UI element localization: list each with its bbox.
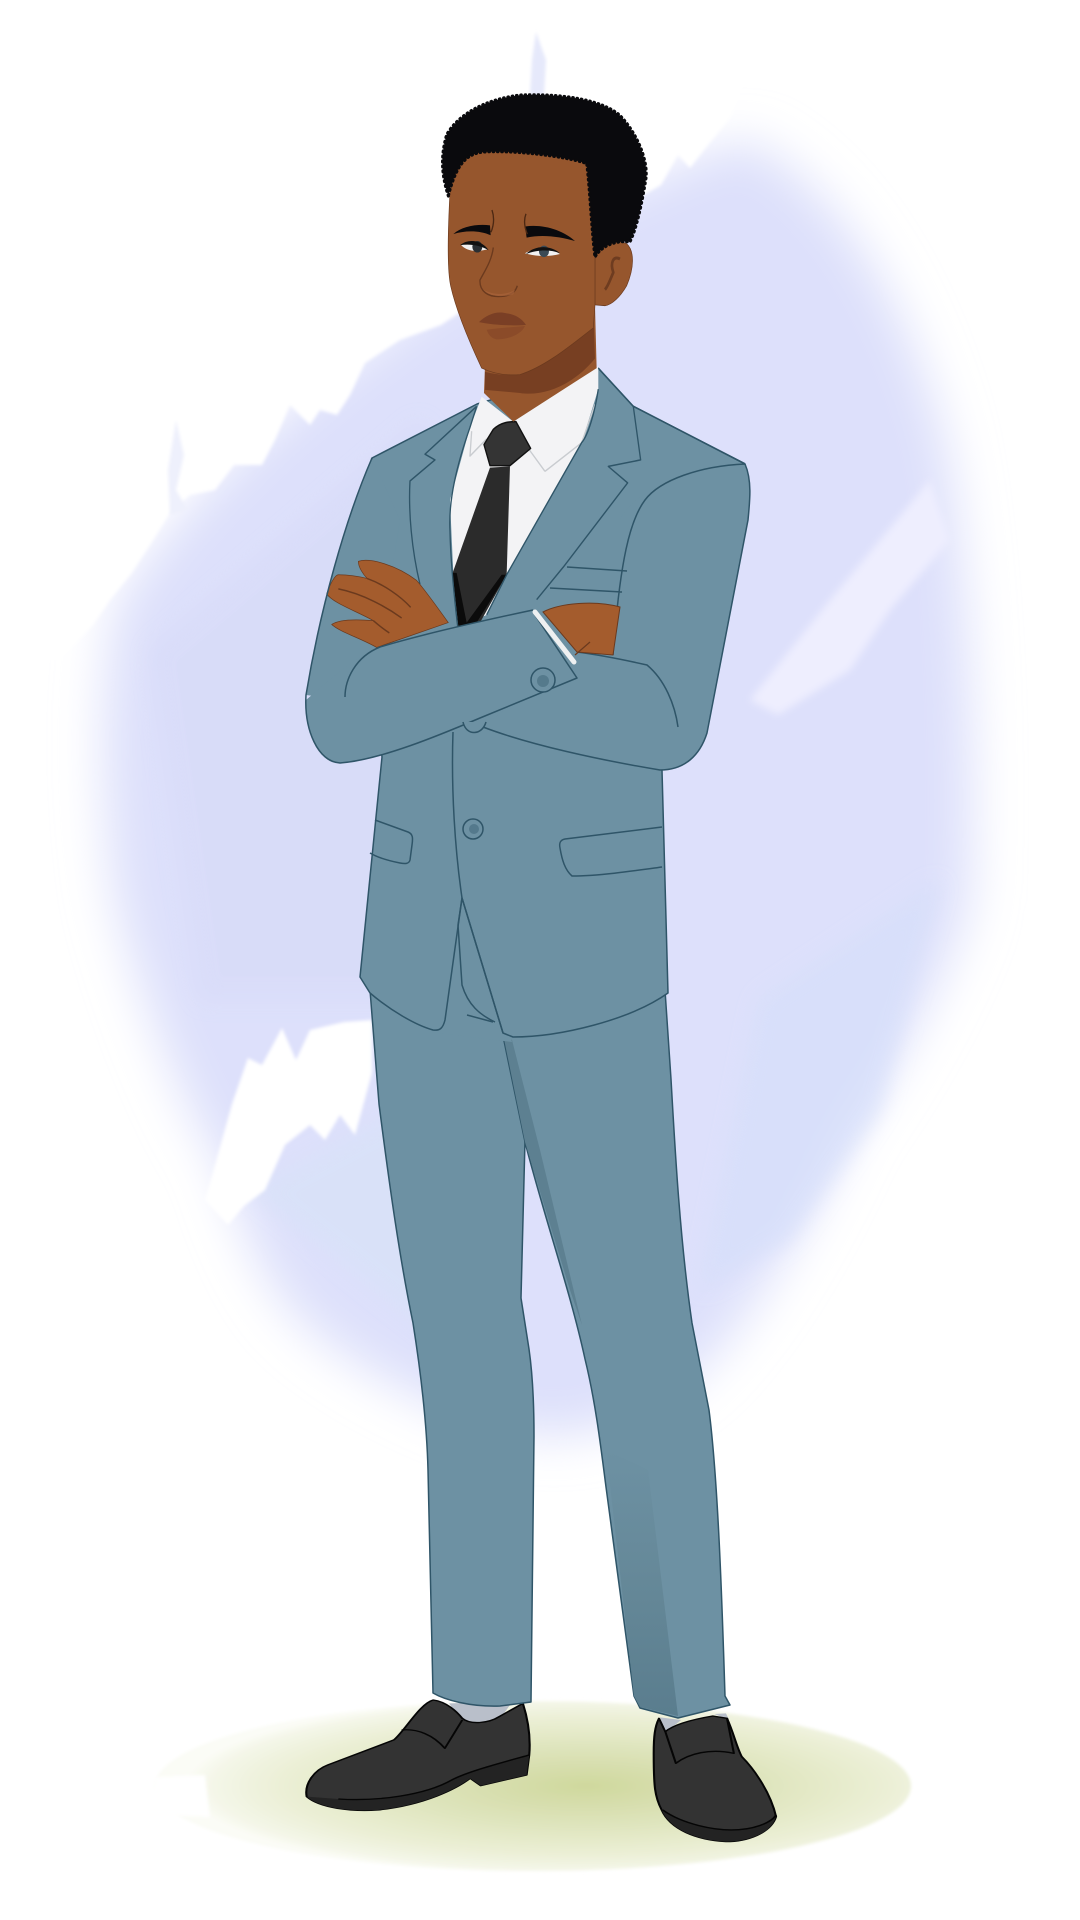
lips [479,312,526,339]
figure: head [442,95,646,422]
figure: left trouser leg [370,990,534,1706]
upper jacket button [463,722,486,732]
figure: left forearm [306,458,577,763]
jacket button [463,819,483,839]
shirt [450,366,598,628]
white torn edge, upper left [0,0,780,660]
figure: left shoe and sock [306,1700,530,1810]
nose shading [483,290,515,296]
brow creases [491,210,527,234]
trouser fill between jacket fronts [430,885,512,1042]
neck shadow [485,328,595,394]
jacket lapels [367,368,745,626]
wrist crease [575,642,590,655]
faint drip above head [530,32,546,95]
jacket front edge and lining [452,732,503,1033]
figure: left upper arm [306,458,400,700]
watercolor background blob [104,140,972,1436]
right arm outlines [483,464,750,770]
ground shadow [150,1701,911,1871]
sleeve button [531,668,555,692]
hair [442,95,646,257]
face [448,151,595,375]
shirt collar lines [470,404,595,471]
nose [480,248,517,297]
left eye [460,241,489,252]
figure: right trouser leg [503,990,730,1718]
white torn patch, lower left [205,1020,372,1225]
neck [484,305,597,422]
figure: jacket torso [360,368,745,1037]
figure: left hand [327,560,448,647]
faint wisp, upper left [168,420,188,515]
figure: right shoe and sock [654,1713,776,1842]
right hip pocket [560,827,662,876]
right forearm skin [543,603,620,655]
upper body group in head-crop coordinates [367,366,745,628]
left hip pocket [370,820,413,864]
right eye [525,246,560,257]
figure: right arm [483,464,750,770]
eyebrows [453,225,575,241]
ear [595,242,633,306]
tie [453,422,531,626]
